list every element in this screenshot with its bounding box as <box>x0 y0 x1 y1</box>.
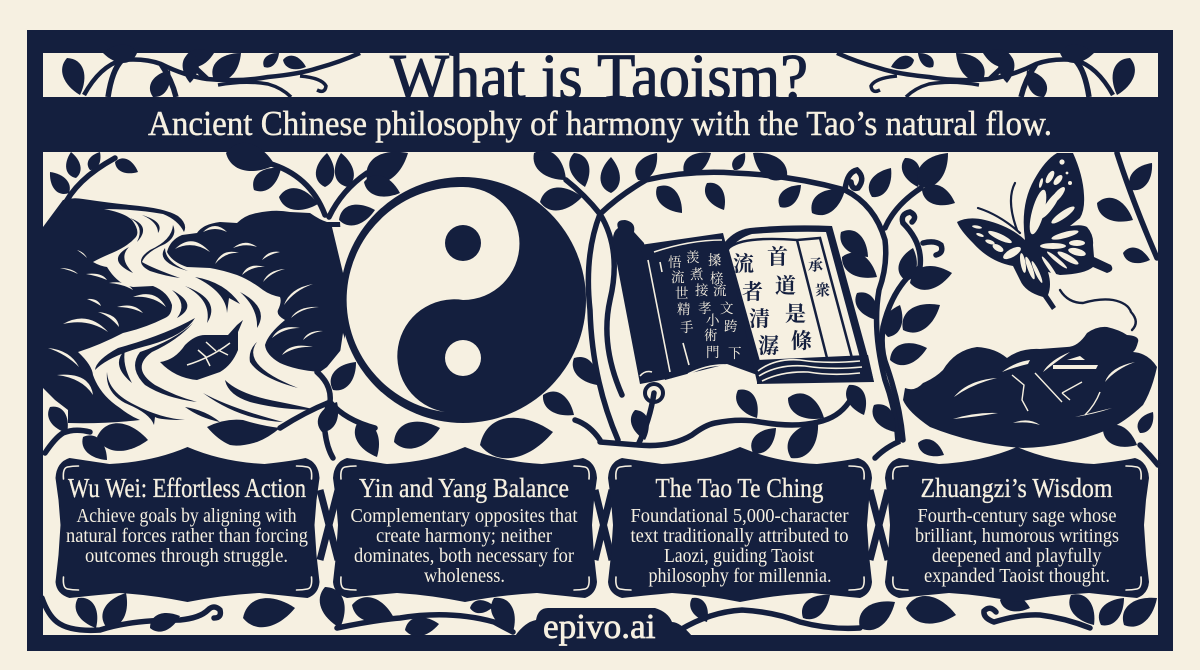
subtitle band <box>43 97 1158 152</box>
right page frame lines <box>730 238 852 358</box>
brand text: epivo.ai <box>543 607 656 646</box>
title: What is Taoism? <box>390 41 808 114</box>
right page calligraphy, second column: 流者清潺 <box>733 252 779 358</box>
footer brand tab <box>515 607 692 646</box>
card body: Fourth-century sage whose <box>918 505 1117 527</box>
card: Tao Te Ching <box>608 447 872 602</box>
decorative vine: top left <box>58 44 360 101</box>
card body: natural forces rather than forcing <box>66 525 308 547</box>
sleeper robe lines <box>1012 373 1100 415</box>
left page text, left column: 悟流世精手 <box>668 254 694 335</box>
card body: text traditionally attributed to <box>630 525 848 547</box>
card body: dominates, both necessary for <box>354 545 574 567</box>
left river bank <box>43 198 185 423</box>
sleeper silhouette <box>903 327 1157 448</box>
card body: Laozi, guiding Taoist <box>664 545 814 567</box>
card body: Achieve goals by aligning with <box>76 505 296 527</box>
card body: brilliant, humorous writings <box>915 525 1119 547</box>
icon: floating leaf <box>160 320 243 380</box>
card body: deepened and playfully <box>932 545 1102 567</box>
illustration: foliage vines <box>42 139 1164 638</box>
vine lattice between cards <box>320 490 888 560</box>
card: Zhuangzi <box>885 447 1149 602</box>
illustration: river landscape <box>43 198 345 446</box>
cream gap beside yin-yang <box>332 227 365 372</box>
leaves below the cards <box>71 583 1164 638</box>
card body: Foundational 5,000-character <box>630 505 849 527</box>
card body <box>915 505 1119 587</box>
card: Yin and Yang <box>333 447 597 602</box>
card body: outcomes through struggle. <box>85 545 288 567</box>
card body: wholeness. <box>424 565 505 587</box>
decorative vine: top right <box>837 44 1139 101</box>
dark river current streaks <box>95 215 317 446</box>
leaves along the central arch <box>600 145 1159 369</box>
card body: philosophy for millennia. <box>648 565 832 587</box>
scroll roller ring <box>645 384 663 402</box>
left page text columns: 搡榇流文跨下 <box>708 252 742 361</box>
illustration: sleeping Zhuangzi <box>903 327 1157 448</box>
card body: expanded Taoist thought. <box>924 565 1110 587</box>
lower cream panel <box>43 152 1158 635</box>
card body: Complementary opposites that <box>350 505 578 527</box>
left page margins <box>640 240 727 376</box>
scroll rod <box>613 220 672 384</box>
card heading: The Tao Te Ching <box>656 473 824 503</box>
side column calligraphy: 承衆 <box>808 257 830 299</box>
card heading: Yin and Yang Balance <box>359 473 569 503</box>
icon: yin-yang <box>340 177 586 423</box>
subtitle: Ancient Chinese philosophy of harmony with the Tao’s natural flow. <box>148 104 1052 143</box>
illustration: butterfly <box>957 153 1136 330</box>
bottom page edges <box>757 355 874 384</box>
card body <box>630 505 849 587</box>
leaves in the upper-left and upper-middle <box>44 139 595 229</box>
wings <box>957 153 1112 310</box>
right page <box>725 225 874 382</box>
card body <box>66 505 308 567</box>
right page calligraphy: 首道是條 <box>767 245 813 353</box>
left page <box>640 233 760 380</box>
wing cells <box>972 159 1087 284</box>
vine stems <box>42 153 1158 632</box>
left page text, middle column: 羡煮接孝小術門 <box>686 250 720 360</box>
antennae <box>978 183 1020 233</box>
card heading: Zhuangzi’s Wisdom <box>920 473 1112 503</box>
card: Wu Wei <box>56 447 320 602</box>
illustration: open book <box>613 220 874 402</box>
card body <box>350 505 578 587</box>
wisp <box>1060 290 1136 330</box>
header panel with title <box>43 41 1158 114</box>
card body: create harmony; neither <box>376 525 552 547</box>
sleeper highlights <box>953 352 1135 425</box>
card heading: Wu Wei: Effortless Action <box>68 473 306 503</box>
cream highlights on the banks <box>48 226 323 395</box>
right river bank <box>167 211 345 372</box>
leaves above the cards <box>44 351 1158 466</box>
